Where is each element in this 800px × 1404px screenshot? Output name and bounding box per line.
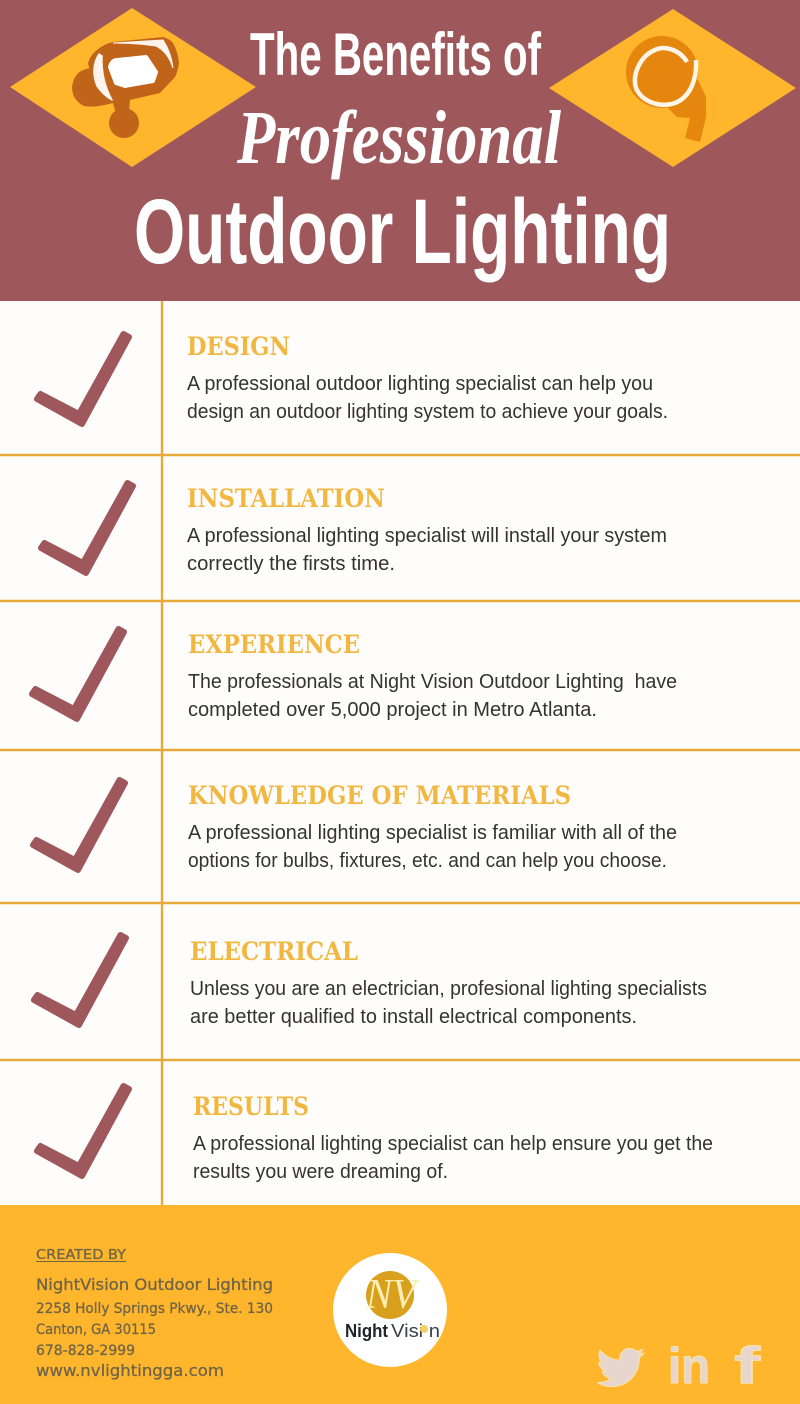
text: knowledge body: A professional lighting specialist is familiar with all of the [188, 822, 677, 844]
icon: left diamond with floodlight [10, 8, 256, 167]
footer: company contact details [36, 1275, 273, 1380]
heading: installation: INSTALLATION [187, 484, 385, 513]
text: design body: A professional outdoor lighting specialist can help you [187, 373, 653, 395]
text: knowledge body: options for bulbs, fixtures, etc. and can help you choose. [188, 850, 667, 872]
footer: created by: CREATED BY [36, 1248, 126, 1263]
icon: check mark [34, 935, 126, 1025]
text: results body: A professional lighting specialist can help ensure you get the [193, 1133, 713, 1155]
heading: design: DESIGN [187, 332, 290, 361]
text: electrical body: Unless you are an electrician, profesional lighting specialists [190, 978, 707, 1000]
text: electrical body: are better qualified to install electrical components. [190, 1006, 637, 1028]
row: electrical [34, 935, 707, 1028]
row: installation [41, 483, 667, 575]
heading: experience: EXPERIENCE [188, 630, 360, 659]
row: experience [32, 629, 677, 721]
icon: right diamond with spotlight [549, 9, 796, 167]
header banner [0, 0, 800, 301]
text: results body: results you were dreaming of. [193, 1161, 448, 1183]
icon: check mark [32, 629, 124, 719]
heading: knowledge of materials: KNOWLEDGE OF MATERIALS [188, 781, 571, 810]
logo: night vision: Night [345, 1321, 388, 1341]
heading: results: RESULTS [193, 1092, 309, 1121]
heading: electrical: ELECTRICAL [190, 937, 358, 966]
logo: night vision: NV [365, 1272, 420, 1318]
row: knowledge of materials [33, 780, 677, 872]
text: experience body: completed over 5,000 project in Metro Atlanta. [188, 699, 597, 721]
icon: check mark [41, 483, 133, 573]
icon: check mark [37, 334, 129, 424]
footer: company contact details: 2258 Holly Springs Pkwy., Ste. 130 [36, 1301, 273, 1317]
footer: company contact details: NightVision Outdoor Lighting [36, 1275, 273, 1294]
text: installation body: correctly the firsts time. [187, 553, 395, 575]
row: results [37, 1086, 713, 1183]
icon: facebook: f [734, 1337, 761, 1395]
text: design body: design an outdoor lighting system to achieve your goals. [187, 401, 668, 423]
text: experience body: The professionals at Night Vision Outdoor Lighting have [188, 671, 677, 693]
title: professional: Professional [236, 96, 561, 180]
icon: linkedin: in [668, 1338, 710, 1394]
icon: twitter [597, 1348, 644, 1387]
grid lines [0, 301, 800, 1205]
logo: night vision: Visi n [391, 1321, 440, 1341]
footer: company contact details: Canton, GA 30115 [36, 1322, 156, 1338]
icon: check mark [33, 780, 125, 870]
text: installation body: A professional lighting specialist will install your system [187, 525, 667, 547]
footer panel [0, 1205, 800, 1404]
footer: company contact details: www.nvlightingga.com [36, 1361, 224, 1380]
row: design [37, 332, 668, 424]
icon: check mark [37, 1086, 129, 1176]
footer: company contact details: 678-828-2999 [36, 1343, 135, 1359]
title: the benefits of: The Benefits of [250, 21, 542, 88]
logo: night vision [333, 1253, 447, 1367]
